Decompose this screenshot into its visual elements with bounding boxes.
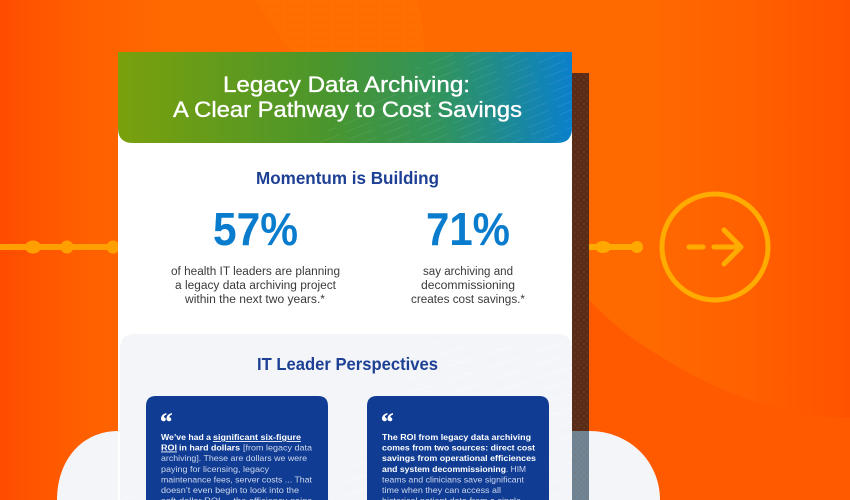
quote text: teams and clinicians save significant [382,474,525,484]
icon: quote mark: “ [160,409,172,436]
cloud base [57,431,660,500]
quote text: ROI [161,442,177,452]
quote text [382,432,536,500]
shadow over cloud [572,431,589,500]
quote text: The ROI from legacy data archiving [382,432,531,442]
quote text [161,432,313,500]
stat description [171,266,340,306]
quote text: [from legacy data [243,442,312,452]
heading: perspectives: IT Leader Perspectives [257,354,438,374]
card [118,52,572,500]
quote text: comes from two sources: direct cost [382,442,535,452]
title: Legacy Data Archiving: [223,72,470,97]
quote text: and system decommissioning [382,464,506,474]
panel: IT leader perspectives [120,334,572,500]
stat: 57%: 57% [213,203,298,255]
quote text: time when they can access all [382,485,501,495]
card body [118,52,572,500]
quote text: in hard dollars [179,442,240,452]
quote card: left [146,396,328,500]
title: A Clear Pathway to Cost Savings [173,97,522,122]
stat description: decommissioning [421,280,515,292]
stat: 71%: 71% [426,203,510,255]
quote text: We’ve had a [161,432,211,442]
stat description: a legacy data archiving project [175,280,337,292]
quote text: maintenance fees, server costs ... That [161,474,313,484]
quote text: significant six-figure [213,432,301,442]
quote card: right [367,396,549,500]
connector line: right [589,241,643,253]
icon: circled arrow [662,194,768,300]
stat: 57% [171,203,340,306]
quote text: doesn’t even begin to look into the [161,485,299,495]
title [173,72,522,122]
quote text: savings from operational efficiences [382,453,536,463]
quote text: . HIM [506,464,526,474]
stat: 71% [411,203,526,306]
heading: momentum: Momentum is Building [256,168,439,188]
quote text: archiving]. These are dollars we were [161,453,307,463]
stat description: say archiving and [423,266,513,278]
quote text: paying for licensing, legacy [161,464,270,474]
stat description: of health IT leaders are planning [171,266,340,278]
title banner [118,52,572,143]
stat description: within the next two years.* [184,294,326,306]
card shadow [572,73,589,431]
stat description [411,266,526,306]
connector line: left [0,240,120,254]
icon: quote mark: “ [381,409,394,436]
stat description: creates cost savings.* [411,294,526,306]
